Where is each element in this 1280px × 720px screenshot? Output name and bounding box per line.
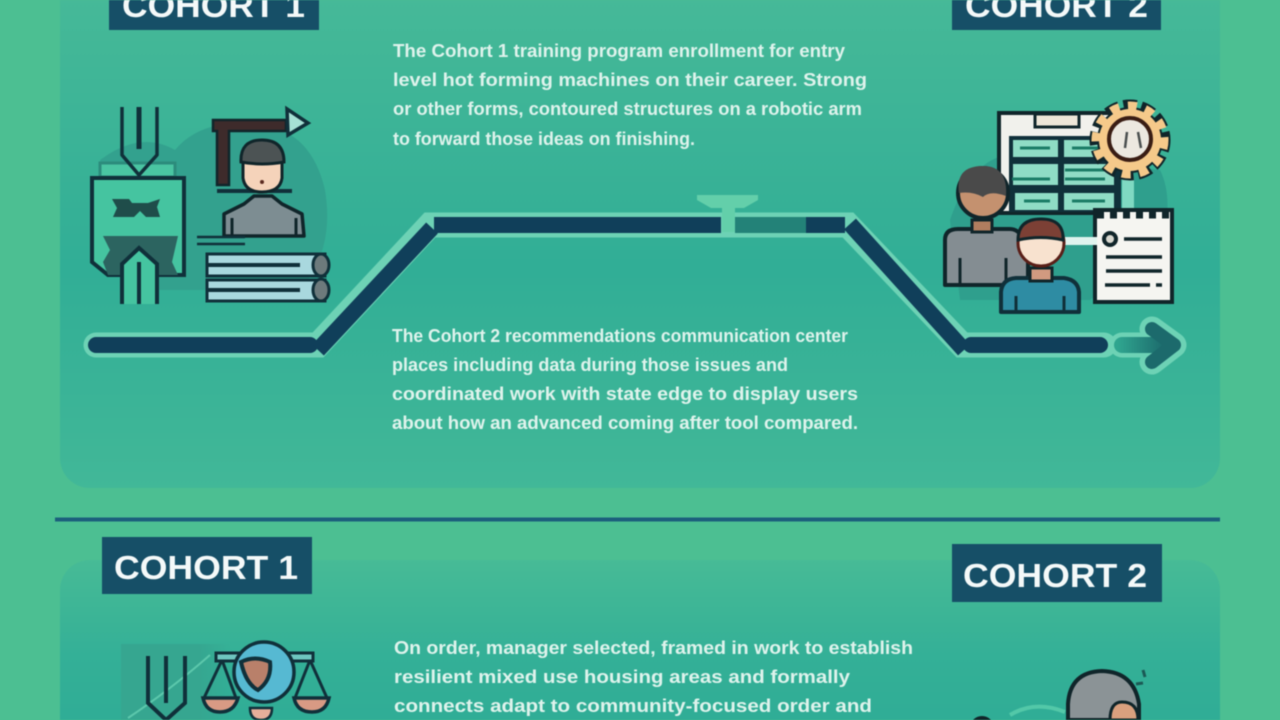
child figure — [1001, 219, 1079, 312]
icon: team with dashboard — [945, 105, 1172, 312]
fork — [148, 656, 185, 720]
support post — [1122, 178, 1134, 212]
label: lower cohort 2: COHORT 2 — [963, 557, 1147, 594]
notepad — [1095, 210, 1172, 302]
press machine — [92, 107, 184, 304]
globe — [234, 642, 294, 720]
label: upper cohort 1 — [109, 0, 319, 30]
icon: fork and scales — [121, 642, 329, 720]
stacked bars — [207, 254, 329, 301]
text block: lower description — [394, 637, 913, 716]
text block: middle description: The Cohort 2 recommendations communication center — [392, 325, 848, 346]
text block: upper description: or other forms, contoured structures on a robotic arm — [393, 98, 862, 119]
text block: lower description: resilient mixed use housing areas and formally — [394, 666, 851, 687]
text block: upper description — [393, 40, 867, 149]
shelf — [197, 237, 245, 244]
worker — [224, 140, 304, 236]
icon: lower person — [970, 670, 1145, 720]
text block: middle description: about how an advanced coming after tool compared. — [392, 412, 858, 433]
panel: upper comparison — [60, 0, 1220, 488]
milestone marker — [697, 195, 758, 232]
label: upper cohort 2 — [952, 0, 1161, 30]
label: lower cohort 1 — [102, 537, 312, 594]
panel: lower comparison — [60, 560, 1220, 720]
robot arm — [213, 109, 308, 191]
adult figure — [945, 166, 1028, 285]
label: lower cohort 2 — [952, 544, 1162, 602]
label: lower cohort 1: COHORT 1 — [114, 549, 298, 586]
text block: upper description: to forward those ideas on finishing. — [393, 128, 695, 149]
divider line — [55, 518, 1220, 522]
text block: upper description: level hot forming machines on their career. Strong — [393, 69, 867, 90]
text block: lower description: On order, manager selected, framed in work to establish — [394, 637, 913, 658]
text block: upper description: The Cohort 1 training program enrollment for entry — [393, 40, 846, 61]
gear — [1095, 105, 1165, 175]
process path with arrow — [96, 195, 1174, 362]
white base strip — [1065, 237, 1097, 245]
text block: middle description — [392, 325, 858, 433]
icon: machine and worker — [92, 107, 329, 304]
text block: lower description: connects adapt to community-focused order and — [394, 695, 872, 716]
text block: middle description: coordinated work with state edge to display users — [392, 383, 858, 404]
scales — [203, 653, 329, 712]
dashboard board — [999, 113, 1121, 213]
text block: middle description: places including data during those issues and — [392, 354, 788, 375]
arrow head — [1122, 329, 1174, 362]
